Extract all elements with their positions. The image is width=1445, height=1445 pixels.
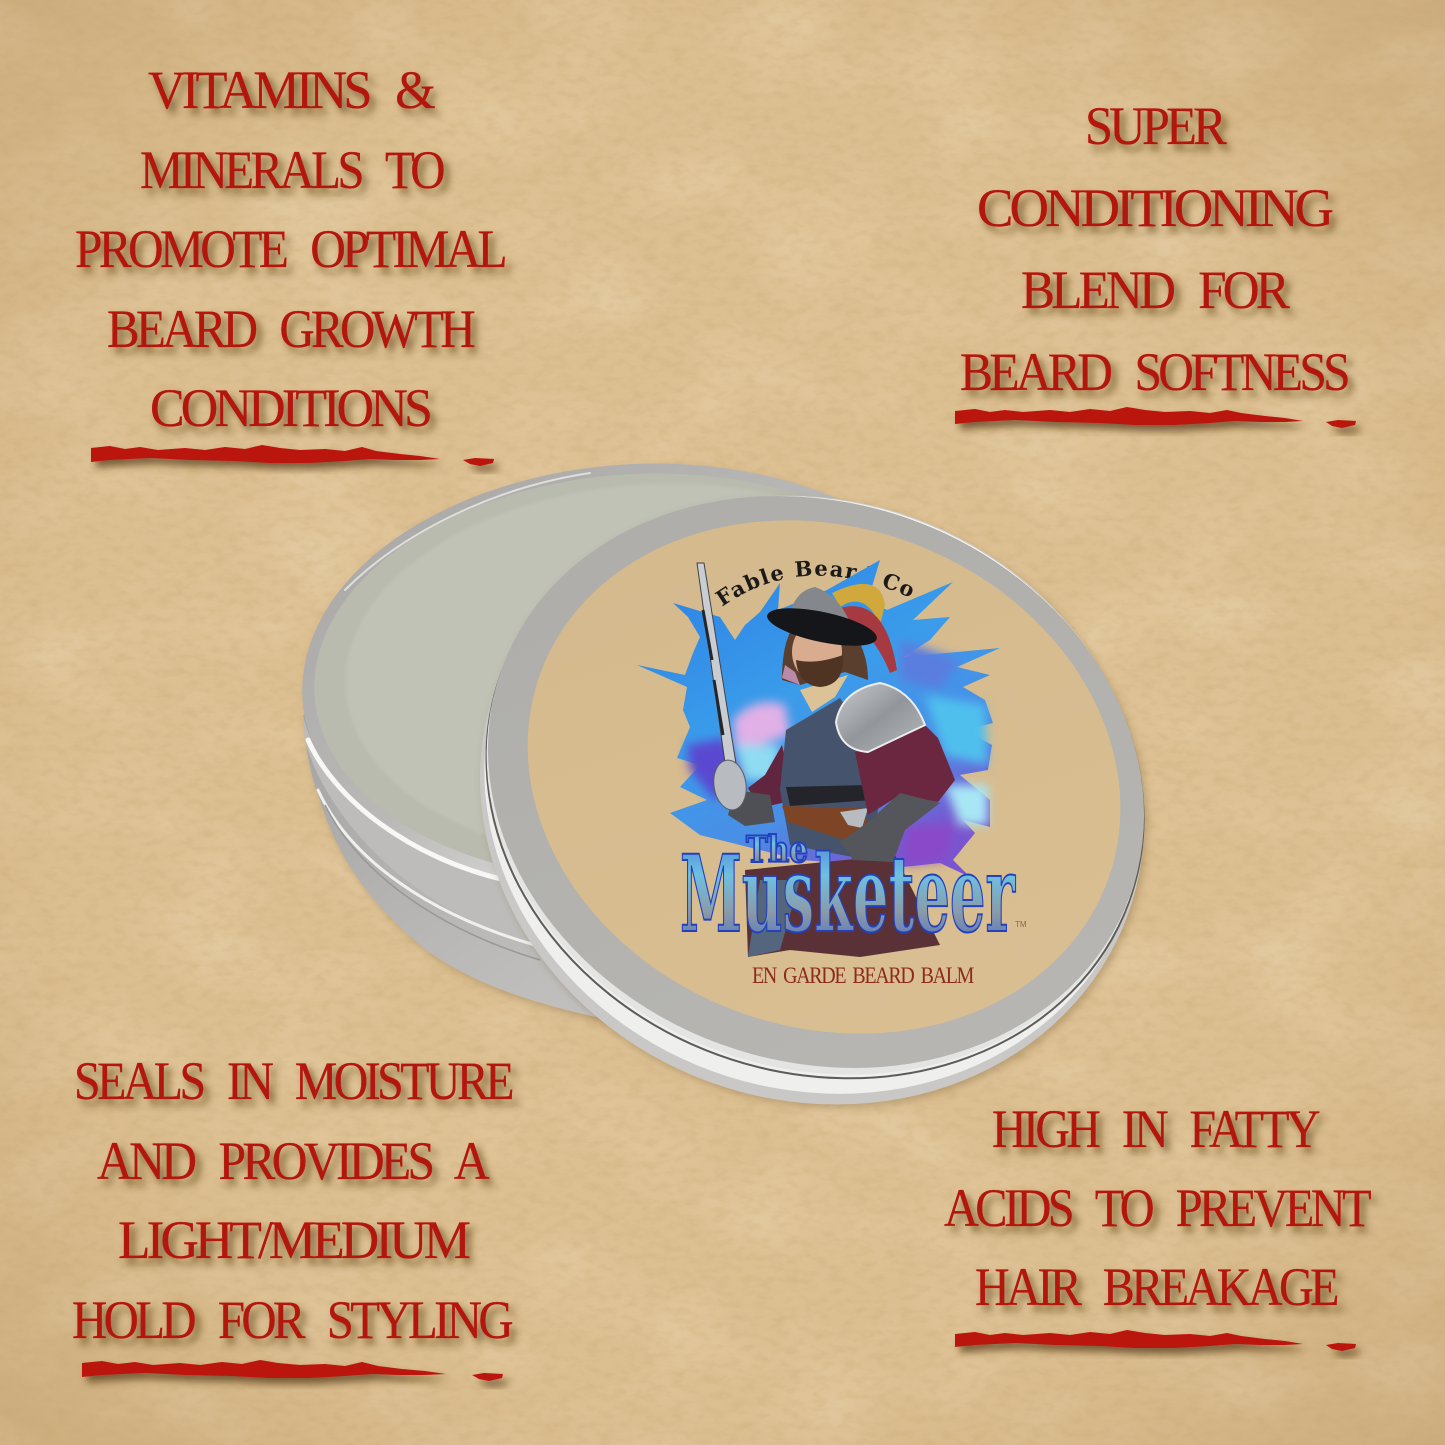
text block: super conditioning: BLEND FOR <box>1021 260 1290 320</box>
blue splash <box>637 560 1000 877</box>
lid label <box>455 439 1193 1115</box>
tin rim <box>291 447 989 913</box>
underline brush stroke: top left <box>91 445 494 466</box>
product name: EN GARDE BEARD BALM <box>752 963 974 988</box>
lid top face <box>407 406 1225 1158</box>
pauldron <box>836 683 925 752</box>
underline brush stroke: top right <box>955 407 1356 428</box>
text block: super conditioning: BEARD SOFTNESS <box>960 342 1348 402</box>
clouds <box>687 640 988 865</box>
lid side <box>394 403 1230 1197</box>
text block: seals in moisture: SEALS IN MOISTURE <box>74 1051 513 1111</box>
scarf <box>800 675 848 712</box>
underline brush stroke: bottom left <box>82 1360 503 1381</box>
brand arc text: Fable Beard Co <box>714 560 913 606</box>
torso <box>780 698 880 860</box>
text block: vitamins and minerals: VITAMINS & <box>148 60 436 120</box>
logo: The Musketeer: The <box>746 829 808 871</box>
text block: seals in moisture: HOLD FOR STYLING <box>72 1290 513 1350</box>
text block: super conditioning <box>960 96 1348 402</box>
glove and hand <box>840 793 940 862</box>
product: open tin base with balm <box>291 447 989 1040</box>
text block: vitamins and minerals: BEARD GROWTH <box>107 299 475 359</box>
text block: super conditioning: CONDITIONING <box>977 178 1333 238</box>
right sleeve <box>855 725 955 815</box>
face and beard <box>792 622 842 682</box>
left sleeve <box>748 745 795 808</box>
text block: seals in moisture <box>72 1051 513 1350</box>
text block: seals in moisture: LIGHT/MEDIUM <box>118 1210 470 1270</box>
underline brush stroke: bottom right <box>955 1330 1356 1351</box>
tin thread band <box>303 715 780 1000</box>
text block: high in fatty acids: ACIDS TO PREVENT <box>944 1178 1372 1238</box>
balm surface <box>304 457 976 897</box>
text block: vitamins and minerals: CONDITIONS <box>150 378 430 438</box>
hair <box>782 625 868 685</box>
text block: super conditioning: SUPER <box>1085 96 1227 156</box>
text block: vitamins and minerals: MINERALS TO <box>140 140 444 200</box>
legs <box>745 855 940 957</box>
sword guard <box>711 758 749 812</box>
text block: seals in moisture: AND PROVIDES A <box>97 1131 490 1191</box>
text block: vitamins and minerals <box>75 60 505 438</box>
text block: high in fatty acids: HAIR BREAKAGE <box>975 1257 1338 1317</box>
product: tin lid <box>394 403 1230 1197</box>
logo: The Musketeer: Musketeer <box>680 831 1016 956</box>
logo: The Musketeer <box>680 829 1016 956</box>
illustration: musketeer <box>637 560 1000 957</box>
text block: high in fatty acids <box>944 1099 1372 1317</box>
trademark: TM <box>1015 920 1027 929</box>
text block: vitamins and minerals: PROMOTE OPTIMAL <box>75 219 505 279</box>
text block: high in fatty acids: HIGH IN FATTY <box>992 1099 1320 1159</box>
tin base wall <box>303 700 780 1040</box>
feathers <box>832 584 885 625</box>
hat <box>790 587 850 628</box>
sword blade <box>697 563 737 770</box>
